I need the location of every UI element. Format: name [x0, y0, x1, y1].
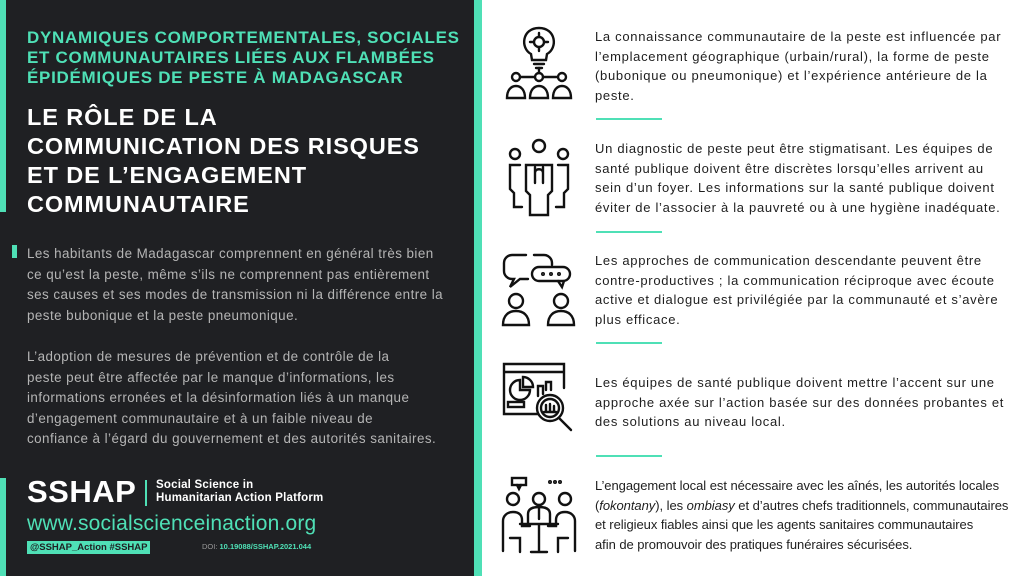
- social tag: @SSHAP_Action #SSHAP: [30, 542, 147, 553]
- body text: confiance à l’égard du gouvernement et des autorités sanitaires.: [27, 431, 436, 446]
- title: ET DE L’ENGAGEMENT: [27, 162, 307, 188]
- text 5: afin de promouvoir des pratiques funéraires sécurisées.: [595, 536, 912, 552]
- text 2: santé publique doivent être discrètes lorsqu’elles arrivent au: [595, 160, 984, 176]
- subtitle: ET COMMUNAUTAIRES LIÉES AUX FLAMBÉES: [27, 48, 435, 67]
- body text: L’adoption de mesures de prévention et de contrôle de la: [27, 349, 389, 364]
- website: www.socialscienceinaction.org: [27, 512, 316, 535]
- text 3: [595, 253, 998, 326]
- subtitle: DYNAMIQUES COMPORTEMENTALES, SOCIALES: [27, 28, 460, 47]
- logo SSHAP: [27, 474, 323, 509]
- text 4: Les équipes de santé publique doivent mettre l’accent sur une: [595, 375, 995, 390]
- text 5: [595, 478, 1008, 552]
- text 1: La connaissance communautaire de la peste est influencée par: [595, 29, 1001, 44]
- body text: ses causes et ses modes de transmission ni la différence entre la: [27, 287, 443, 302]
- text 5: L’engagement local est nécessaire avec les aînés, les autorités locales: [595, 478, 999, 493]
- title: [27, 104, 420, 217]
- panel: dark left: [0, 0, 482, 576]
- subtitle: ÉPIDÉMIQUES DE PESTE À MADAGASCAR: [27, 68, 403, 87]
- accent mark: [12, 245, 17, 258]
- text 2: Un diagnostic de peste peut être stigmatisant. Les équipes de: [595, 141, 993, 156]
- title: COMMUNAUTAIRE: [27, 191, 250, 217]
- body text: peste bubonique et la peste pneumonique.: [27, 308, 298, 323]
- text 3: plus efficace.: [595, 312, 680, 326]
- text 2: éviter de l’associer à la pauvreté ou à une hygiène inadéquate.: [595, 200, 1000, 214]
- logo SSHAP: Humanitarian Action Platform: [156, 492, 323, 504]
- body text: informations erronées et la désinformation liés à un manque: [27, 390, 409, 405]
- body text: [27, 246, 443, 446]
- text 2: [595, 141, 1000, 214]
- body text: peste peut être affectée par le manque d’informations, les: [27, 370, 395, 385]
- text 3: Les approches de communication descendante peuvent être: [595, 253, 982, 268]
- title: COMMUNICATION DES RISQUES: [27, 133, 420, 159]
- accent bar bottom: [0, 478, 6, 576]
- title: LE RÔLE DE LA: [27, 104, 218, 130]
- text 4: des solutions au niveau local.: [595, 414, 786, 429]
- logo SSHAP: SSHAP: [27, 474, 136, 509]
- text 5: (fokontany), les ombiasy et d’autres chefs traditionnels, communautaires: [595, 498, 1008, 512]
- icon: dialogue: [502, 254, 576, 326]
- text 1: peste.: [595, 88, 635, 102]
- body text: ce qu’est la peste, même s’ils ne comprennent pas entièrement: [27, 267, 430, 282]
- DOI: DOI: 10.19088/SSHAP.2021.044: [202, 542, 311, 551]
- icon: group of people: [508, 138, 570, 216]
- text 1: [595, 29, 1001, 102]
- text 3: contre-productives ; la communication réciproque avec écoute: [595, 272, 995, 288]
- accent bar top: [0, 0, 6, 212]
- body text: Les habitants de Madagascar comprennent en général très bien: [27, 246, 434, 261]
- icon: lightbulb network: [506, 26, 572, 100]
- subtitle: [27, 28, 460, 87]
- icon: data analysis: [502, 362, 572, 432]
- text 2: sein d’un foyer. Les informations sur la santé publique doivent: [595, 180, 995, 195]
- text 5: et religieux fiables ainsi que les agents sanitaires communautaires: [595, 517, 973, 532]
- text 1: (bubonique ou pneumonique) et l’expérience antérieure de la: [595, 68, 988, 83]
- icon: meeting: [502, 476, 576, 554]
- text 4: [595, 375, 1004, 429]
- text 1: l’emplacement géographique (urbain/rural), la forme de peste: [595, 48, 990, 64]
- logo SSHAP: Social Science in: [156, 479, 253, 491]
- text 3: active et dialogue est privilégiée par la communauté et s’avère: [595, 292, 998, 307]
- body text: d’engagement communautaire et à un faible niveau de: [27, 411, 373, 426]
- text 4: approche axée sur l’action basée sur des données probantes et: [595, 394, 1004, 410]
